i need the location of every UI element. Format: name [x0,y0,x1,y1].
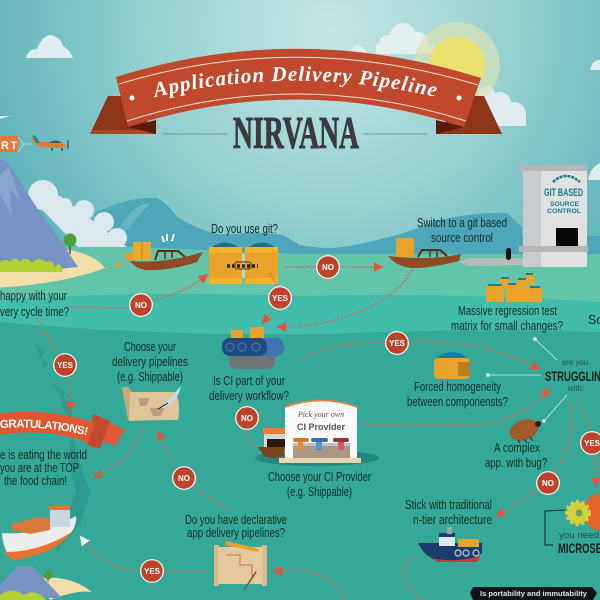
sea light band [0,247,600,320]
question: switch to git [417,216,507,245]
struggling callout: are you [562,358,588,367]
tanker dock boat [388,238,532,268]
struggling callout: with: [567,384,584,393]
congratulations text: the food chain! [4,474,67,488]
badge labels: YES [389,339,406,348]
map with ruler [214,541,267,590]
badge labels: YES [57,361,74,370]
question: choose CI provider: (e.g. Shippable) [287,485,352,499]
question: regression [451,304,563,333]
question: homogeneity: Forced homogeneity [414,380,502,394]
subtitle NIRVANA: NIRVANA [233,108,359,158]
question: delivery pipelines: delivery pipelines [112,355,188,369]
bug icon [506,415,542,445]
bottom question label [470,587,597,600]
tower git based source control: CONTROL [547,208,581,215]
question: regression: matrix for small changes? [451,319,563,333]
question: bug: A complex [494,441,541,455]
clouds [0,23,600,248]
question: homogeneity [407,380,508,409]
ship wake [36,345,90,553]
bottom island [0,566,92,600]
distant mountains [95,198,600,258]
struggling callout [545,358,600,393]
badge labels: NO [322,263,334,272]
question: git: Do you use git? [211,222,278,236]
plane with START banner [0,135,68,152]
badge labels: NO [178,474,190,483]
question: declarative: Do you have declarative [185,513,287,527]
sky background [0,0,600,260]
question: delivery pipelines: (e.g. Shippable) [117,370,183,384]
CI provider kiosk: Pick your own [297,410,344,419]
boat with crates [114,234,203,270]
tower git based source control [519,165,588,267]
badge labels: YES [584,439,600,448]
question: CI: delivery workflow? [209,389,289,403]
badge labels: NO [135,301,147,310]
congratulations text: you are at the TOP [0,461,79,475]
chained git box [209,242,278,284]
badge labels: YES [272,294,289,303]
microservices callout: you need [559,530,599,540]
map and quill [122,386,181,421]
question: happy with cycle time: happy with your [0,289,67,303]
question: declarative: app delivery pipelines? [187,526,285,540]
question: bug: app. with bug? [485,456,547,470]
question: switch to git: Switch to a git based [417,216,507,230]
container ship [2,506,76,560]
question: regression: Massive regression test [458,304,557,318]
question: declarative [185,513,287,540]
sea deep [0,322,600,600]
flow arrows [37,267,596,600]
question: switch to git: source control [431,231,493,245]
congratulations text [0,448,87,488]
CI provider kiosk [255,400,379,466]
title banner [90,48,502,134]
tower git based source control: SOURCE [550,201,580,208]
question: choose CI provider [268,470,371,499]
navy ship [418,527,482,562]
regression crates [486,273,542,302]
question: delivery pipelines [112,340,188,384]
question: bug [485,441,547,470]
question: n-tier [405,498,492,527]
question: choose CI provider: Choose your CI Provider [268,470,371,484]
sea mid band [0,294,600,340]
question: n-tier: Stick with traditional [405,498,492,512]
badge labels: YES [144,567,161,576]
question: CI: Is CI part of your [213,374,285,388]
badge labels: NO [542,479,554,488]
microservices callout [558,530,600,556]
island with mountain and beach [0,158,105,288]
question: n-tier: n-tier architecture [413,513,492,527]
badge labels [57,263,600,576]
question: homogeneity: between componensts? [407,395,508,409]
sun [414,22,500,108]
conveyor icon [222,327,284,369]
title banner: Application Delivery Pipeline [154,66,437,98]
crate icon [434,352,470,379]
question: CI [209,374,289,403]
microservices bracket [545,510,565,545]
plane with START banner: RT [1,140,19,152]
congratulations text: e is eating the world [0,448,87,462]
question: happy with cycle time: very cycle time? [0,305,69,319]
question: happy with cycle time [0,289,69,319]
badge labels: NO [241,414,253,423]
decision badges [54,256,600,582]
CI provider kiosk: CI Provider [297,422,346,432]
congratulations ribbon [0,412,125,449]
connectors to struggling [486,338,567,422]
gears [567,494,600,530]
bottom question label: Is portability and immutability [480,591,587,598]
question: delivery pipelines: Choose your [124,340,176,354]
